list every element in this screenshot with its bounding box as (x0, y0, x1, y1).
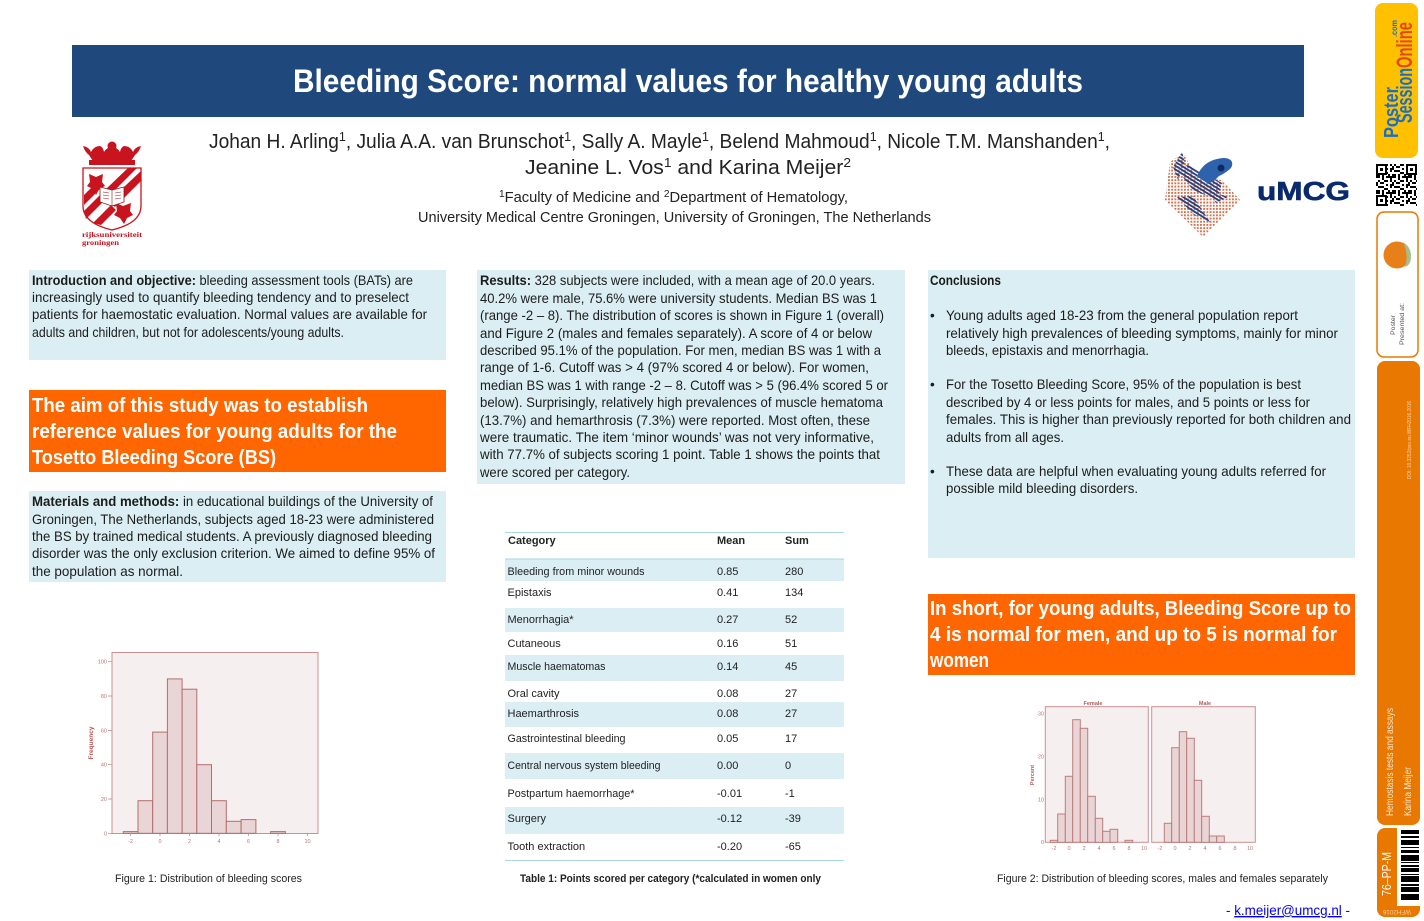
authors: Jeanine L. Vos (525, 157, 656, 179)
panel: materials and methods (29, 491, 446, 582)
sidebar: poster number and barcode (1377, 828, 1420, 917)
panel: introduction and objective: Introduction and objective: bleeding assessment tools (BATs) are (32, 273, 413, 288)
table 1: points scored per category: Postpartum haemorrhage* (508, 788, 635, 800)
chart: figure 2 histograms: Percent (1030, 765, 1036, 785)
table 1: points scored per category: Muscle haematomas (508, 661, 606, 673)
panel: results: (range -2 – 8). The distribution of scores is shown in Figure 1 (overall) (480, 308, 884, 323)
table 1: points scored per category: Category (508, 535, 557, 547)
chart: figure 2 histograms: 20 (1038, 754, 1044, 760)
callout: aim of the study: reference values for young adults for the (32, 420, 397, 443)
table 1: points scored per category: 51 (785, 638, 797, 650)
sidebar: QR code (1376, 164, 1417, 206)
table 1: points scored per category: Sum (785, 535, 809, 547)
panel: materials and methods: Groningen, The Netherlands, subjects aged 18-23 were administered (32, 512, 434, 527)
chart: figure 2 histograms: 0 (1173, 846, 1177, 852)
panel: results: and Figure 2 (males and females separately). A score of 4 or below (480, 326, 872, 341)
callout: aim of the study: Tosetto Bleeding Score (BS) (32, 446, 276, 469)
sidebar: poster number and barcode: 76–PP-M (1380, 852, 1394, 896)
table 1: points scored per category: Menorrhagia* (508, 614, 574, 626)
table 1: points scored per category: 0.85 (717, 566, 738, 578)
authors: , Nicole T.M. Manshanden (877, 131, 1098, 153)
panel: results: described 95.1% of the population. For men, median BS was 1 with a (480, 343, 881, 358)
panel: conclusions: For the Tosetto Bleeding Score, 95% of the population is best (946, 377, 1301, 392)
authors: 1 (870, 129, 877, 144)
title banner: Bleeding Score: normal values for healthy young adults (293, 63, 1083, 99)
authors: , Belend Mahmoud (709, 131, 870, 153)
panel: conclusions: • (930, 308, 935, 323)
chart: figure 1 histogram: 40 (101, 762, 107, 768)
callout: in short: In short, for young adults, Bleeding Score up to (930, 597, 1351, 620)
sidebar: orange topic panel: Hemostasis tests and assays (1384, 708, 1396, 816)
title banner (72, 45, 1304, 117)
panel: conclusions: adults from all ages. (946, 430, 1064, 445)
affiliations: Department of Hematology, (669, 190, 848, 206)
panel: results (477, 270, 905, 484)
panel: introduction and objective: patients for haemostatic evaluation. Normal values are available for (32, 307, 427, 322)
callout: aim of the study: The aim of this study was to establish (32, 394, 368, 417)
sidebar: PosterSessionOnline badge: .com (1390, 20, 1399, 37)
logo: University of Groningen crest: groningen (82, 238, 120, 247)
panel: conclusions: bleeds, epistaxis and menorrhagia. (946, 343, 1149, 358)
table 1: points scored per category: 280 (785, 566, 803, 578)
table 1: points scored per category: 52 (785, 614, 797, 626)
panel: results: range of 1-6. Cutoff was > 4 (97% scored 4 or below). For women, (480, 360, 869, 375)
panel: results: with 77.7% of subjects scoring 1 point. Table 1 shows the points that (479, 447, 880, 462)
panel: conclusions: possible mild bleeding disorders. (946, 481, 1138, 496)
panel: introduction and objective: adults and children, but not for adolescents/young adults. (32, 325, 344, 340)
chart: figure 2 histograms: 8 (1233, 846, 1237, 852)
sidebar: orange topic panel: DOI: 10.3252/pso.eu.WFH2016.2016 (1407, 401, 1413, 479)
callout: aim of the study (29, 390, 446, 472)
chart: figure 2 histograms: 2 (1188, 846, 1192, 852)
sidebar: presented at panel (1377, 212, 1418, 357)
chart: figure 1 histogram (88, 652, 318, 845)
table 1: points scored per category: Bleeding from minor wounds (508, 566, 645, 578)
table 1: points scored per category: -0.01 (717, 788, 742, 800)
logo: University of Groningen crest: rijksuniversiteit (82, 230, 143, 239)
chart: figure 2 histograms: 10 (1247, 846, 1253, 852)
authors: 1 (339, 129, 346, 144)
table 1: points scored per category: Oral cavity (508, 688, 560, 700)
panel: conclusions: Young adults aged 18-23 from the general population report (946, 308, 1298, 323)
sidebar: PosterSessionOnline badge: Session (1392, 68, 1417, 123)
table 1: points scored per category: -65 (785, 841, 801, 853)
authors: 1 (702, 129, 709, 144)
table 1: points scored per category: 0.27 (717, 614, 738, 626)
panel: introduction and objective: increasingly used to quantify bleeding tendency and to preselect (32, 290, 409, 305)
panel: materials and methods: the BS by trained medical students. A previously diagnosed bleeding (32, 529, 432, 544)
panel: conclusions: Conclusions (930, 273, 1001, 288)
panel: results: median BS was 1 with range -2 – 8. Cutoff was > 5 (96.4% scored 5 or (480, 378, 888, 393)
chart: figure 1 histogram: 0 (158, 839, 162, 845)
table 1: points scored per category: 0.05 (717, 733, 738, 745)
table 1: points scored per category: 45 (785, 661, 797, 673)
chart: figure 1 histogram: 6 (247, 839, 250, 845)
chart: figure 1 histogram: 8 (276, 839, 280, 845)
authors: Johan H. Arling (209, 131, 345, 153)
authors: , (1105, 131, 1110, 153)
chart: figure 2 histograms: 30 (1038, 712, 1044, 718)
table 1: points scored per category: -1 (785, 788, 795, 800)
sidebar: PosterSessionOnline badge: Poster (1381, 87, 1403, 138)
chart: figure 2 histograms: 4 (1097, 846, 1101, 852)
affiliations: Faculty of Medicine and (505, 190, 664, 206)
table 1: points scored per category: -0.12 (717, 813, 742, 825)
table 1: points scored per category: Gastrointestinal bleeding (508, 733, 626, 745)
chart: figure 2 histograms (1030, 701, 1255, 852)
sidebar: PosterSessionOnline badge: Online (1392, 22, 1417, 68)
table 1: points scored per category: 0.14 (717, 661, 738, 673)
panel: conclusions: relatively high prevalences of bleeding symptoms, mainly for minor (946, 326, 1338, 341)
logo: UMCG frog (1165, 152, 1350, 237)
callout: in short (928, 594, 1355, 675)
sidebar: orange topic panel (1377, 361, 1420, 825)
chart: figure 2 histograms: 4 (1203, 846, 1207, 852)
chart: figure 1 histogram: 10 (304, 839, 311, 845)
affiliations: University Medical Centre Groningen, University of Groningen, The Netherlands (418, 210, 931, 226)
table 1: points scored per category: 0.41 (717, 587, 738, 599)
panel: results: were scored per category. (479, 465, 630, 480)
caption: figure 1: Figure 1: Distribution of bleeding scores (115, 873, 302, 885)
table 1: points scored per category (505, 532, 844, 860)
panel: conclusions: • (930, 377, 935, 392)
chart: figure 1 histogram: Frequency (88, 726, 95, 759)
authors: 1 (564, 129, 571, 144)
table 1: points scored per category: Epistaxis (508, 587, 552, 599)
sidebar: poster number and barcode: WFH2016 (1383, 908, 1411, 915)
caption: figure 2: Figure 2: Distribution of bleeding scores, males and females separately (997, 873, 1328, 885)
table 1: points scored per category: Cutaneous (508, 638, 561, 650)
callout: in short: 4 is normal for men, and up to 5 is normal for (930, 623, 1337, 646)
panel: results: were traumatic. The item ‘minor wounds’ was not very informative, (479, 430, 874, 445)
table 1: points scored per category: 27 (785, 708, 797, 720)
chart: figure 2 histograms: 6 (1112, 846, 1116, 852)
sidebar: presented at panel: Presented at: (1399, 303, 1406, 345)
table 1: points scored per category: 27 (785, 688, 797, 700)
chart: figure 1 histogram: 100 (98, 660, 107, 666)
authors (209, 129, 1110, 179)
chart: figure 2 histograms: 0 (1067, 846, 1071, 852)
chart: figure 2 histograms: 10 (1141, 846, 1147, 852)
table 1: points scored per category: 0.08 (717, 688, 738, 700)
panel: materials and methods: disorder was the only exclusion criterion. We aimed to define 95% of (32, 546, 435, 561)
chart: figure 1 histogram: 60 (101, 728, 107, 734)
panel: materials and methods: Materials and methods: in educational buildings of the University of (32, 494, 433, 509)
panel: results: (13.7%) and hemarthrosis (7.3%) were reported. Most often, these (480, 413, 870, 428)
sidebar: PosterSessionOnline badge (1375, 3, 1418, 158)
sidebar: presented at panel: Poster (1390, 314, 1397, 335)
panel: results: Results: 328 subjects were included, with a mean age of 20.0 years. (480, 273, 875, 288)
chart: figure 2 histograms: 2 (1082, 846, 1086, 852)
panel: conclusions: These data are helpful when evaluating young adults referred for (946, 464, 1326, 479)
affiliations (418, 189, 931, 226)
chart: figure 2 histograms: -2 (1052, 846, 1056, 852)
authors: 1 (1098, 129, 1105, 144)
chart: figure 2 histograms: Male (1199, 701, 1211, 707)
panel: results: below). Surprisingly, relatively high prevalences of muscle hematoma (480, 395, 883, 410)
chart: figure 2 histograms: 10 (1038, 798, 1044, 804)
table 1: points scored per category: 0.08 (717, 708, 738, 720)
panel: conclusions (928, 270, 1355, 558)
table 1: points scored per category: 0 (785, 760, 791, 772)
chart: figure 1 histogram: 20 (101, 797, 107, 803)
chart: figure 1 histogram: 0 (104, 832, 107, 838)
panel: materials and methods: the population as normal. (32, 564, 183, 579)
panel: conclusions: described by 4 or less points for males, and 5 points or less for (946, 395, 1310, 410)
table 1: points scored per category: 134 (785, 587, 803, 599)
chart: figure 2 histograms: 6 (1218, 846, 1222, 852)
table 1: points scored per category: Haemarthrosis (508, 708, 580, 720)
chart: figure 2 histograms: Female (1084, 701, 1102, 707)
affiliations: 1 (499, 189, 505, 200)
chart: figure 2 histograms: 0 (1041, 840, 1044, 846)
authors: and Karina Meijer (672, 157, 844, 179)
authors: 1 (664, 155, 672, 170)
affiliations: 2 (664, 189, 670, 200)
caption: table 1: Table 1: Points scored per category (*calculated in women only (520, 873, 822, 885)
table 1: points scored per category: Central nervous system bleeding (508, 760, 660, 772)
panel: conclusions: females. This is higher than previously reported for both children and (946, 412, 1351, 427)
panel: results: 40.2% were male, 75.6% were university students. Median BS was 1 (480, 291, 877, 306)
table 1: points scored per category: Mean (717, 535, 745, 547)
logo: University of Groningen crest (82, 142, 143, 247)
chart: figure 1 histogram: 2 (188, 839, 191, 845)
chart: figure 1 histogram: 80 (101, 694, 107, 700)
chart: figure 1 histogram: -2 (128, 839, 133, 845)
table 1: points scored per category: 17 (785, 733, 797, 745)
authors: , Sally A. Mayle (571, 131, 702, 153)
contact email: - k.meijer@umcg.nl - (1226, 902, 1350, 918)
panel: conclusions: • (930, 464, 935, 479)
authors: 2 (843, 155, 851, 170)
table 1: points scored per category: -0.20 (717, 841, 742, 853)
chart: figure 1 histogram: 4 (217, 839, 221, 845)
table 1: points scored per category: 0.16 (717, 638, 738, 650)
table 1: points scored per category: Tooth extraction (508, 841, 585, 853)
authors: , Julia A.A. van Brunschot (346, 131, 565, 153)
chart: figure 2 histograms: -2 (1158, 846, 1162, 852)
table 1: points scored per category: -39 (785, 813, 801, 825)
table 1: points scored per category: 0.00 (717, 760, 738, 772)
table 1: points scored per category: Surgery (508, 813, 547, 825)
logo: UMCG frog: uMCG (1257, 176, 1350, 206)
sidebar: orange topic panel: Karina Meijer (1402, 767, 1414, 816)
panel: introduction and objective (29, 270, 446, 360)
chart: figure 2 histograms: 8 (1127, 846, 1131, 852)
callout: in short: women (929, 649, 989, 672)
